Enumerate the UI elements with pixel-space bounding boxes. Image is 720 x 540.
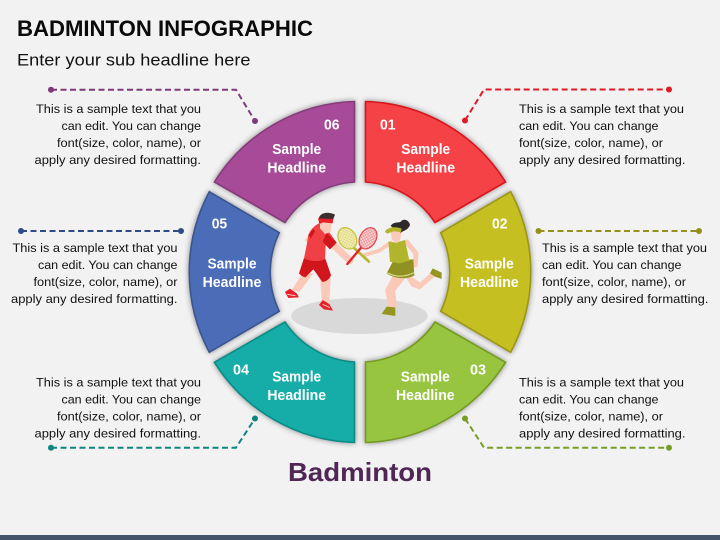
subtitle: Enter your sub headline here (17, 51, 250, 70)
text block 06: can edit. You can change (62, 119, 201, 133)
racket: red (347, 225, 381, 264)
connector 01 (462, 86, 672, 124)
bottom label: Badminton (288, 457, 432, 487)
panel: segment 02: Sample (465, 256, 514, 272)
panel: segment 04 (214, 322, 354, 442)
panel: segment 03: Headline (396, 388, 455, 404)
text block 02: can edit. You can change (542, 258, 682, 272)
panel: segment 03: Sample (401, 369, 450, 385)
text block 03: This is a sample text that you (519, 376, 684, 390)
panel: segment 06: Sample (272, 142, 321, 158)
connector 03 (462, 416, 672, 451)
text block 06: This is a sample text that you (36, 102, 201, 116)
panel: segment 02 (441, 192, 531, 352)
panel: segment 05: Headline (203, 275, 261, 291)
panel: segment 06 (214, 102, 354, 222)
connector 05 (18, 228, 184, 234)
panel: segment 01: 01 (380, 117, 396, 133)
text block 03: font(size, color, name), or (519, 410, 663, 424)
text block 04 (34, 376, 201, 441)
text block 06: font(size, color, name), or (57, 136, 201, 150)
ground shadow (291, 298, 428, 334)
text block 03 (519, 376, 686, 441)
panel: segment 03 (366, 322, 506, 442)
text block 04: can edit. You can change (62, 393, 201, 407)
connector 02 (536, 228, 702, 234)
panel: segment 05: 05 (212, 216, 227, 232)
text block 06 (34, 102, 201, 167)
text block 03: apply any desired formatting. (519, 427, 686, 441)
panel: segment 05 (189, 192, 279, 352)
text block 05: This is a sample text that you (12, 241, 178, 255)
text block 04: apply any desired formatting. (34, 427, 201, 441)
panel: segment 04: 04 (233, 363, 249, 379)
panel: segment 05: Sample (208, 256, 256, 272)
panel: segment 02: Headline (460, 275, 519, 291)
panel: segment 02: 02 (492, 216, 508, 232)
text block 03: can edit. You can change (519, 393, 659, 407)
text block 01: can edit. You can change (519, 119, 659, 133)
panel: segment 01: Sample (401, 142, 450, 158)
panel: segment 04: Headline (267, 388, 326, 404)
player: woman (363, 220, 442, 316)
connector 04 (48, 416, 258, 451)
text block 01 (519, 102, 686, 167)
text block 04: This is a sample text that you (36, 376, 201, 390)
text block 05: apply any desired formatting. (11, 292, 178, 306)
panel: segment 01: Headline (396, 161, 455, 177)
text block 01: apply any desired formatting. (519, 153, 686, 167)
panel: segment 06: Headline (267, 161, 326, 177)
text block 02: apply any desired formatting. (542, 292, 708, 306)
text block 05: can edit. You can change (38, 258, 178, 272)
panel: segment 03: 03 (470, 363, 486, 379)
text block 04: font(size, color, name), or (57, 410, 201, 424)
text block 05: font(size, color, name), or (34, 275, 178, 289)
panel: segment 06: 06 (324, 117, 340, 133)
panel: segment 01 (366, 102, 506, 222)
panel: segment 04: Sample (272, 369, 321, 385)
player: man (285, 213, 353, 311)
text block 02 (542, 241, 708, 306)
illustration: badminton players (285, 213, 442, 334)
text block 02: This is a sample text that you (542, 241, 707, 255)
text block 06: apply any desired formatting. (34, 153, 201, 167)
racket: yellow (334, 224, 369, 262)
title: BADMINTON INFOGRAPHIC (17, 16, 313, 41)
text block 01: This is a sample text that you (519, 102, 684, 116)
connector 06 (48, 87, 258, 124)
text block 05 (11, 241, 178, 306)
text block 02: font(size, color, name), or (542, 275, 686, 289)
text block 01: font(size, color, name), or (519, 136, 663, 150)
